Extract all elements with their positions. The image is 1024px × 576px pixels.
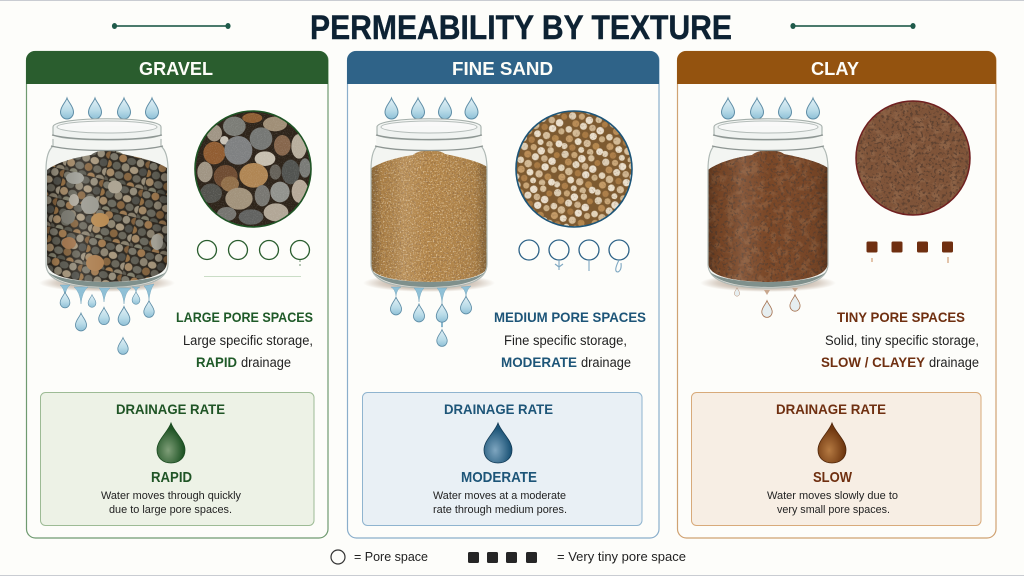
pore description (176, 309, 313, 370)
pore description: RAPID (196, 354, 237, 370)
pore description: drainage (929, 355, 979, 370)
pore description (821, 309, 979, 370)
icon: green drop (157, 423, 185, 463)
water draining from jar (60, 284, 154, 354)
magnified clay circle (855, 100, 971, 216)
tiny pore squares (866, 242, 953, 263)
pore description: LARGE PORE SPACES (176, 309, 313, 325)
drainage rate box (40, 392, 314, 526)
panel frame (26, 52, 328, 538)
title ornament right (790, 23, 916, 29)
drainage rate box (362, 392, 642, 526)
water drops above jar (722, 98, 820, 119)
header bar (677, 51, 996, 84)
panel: gravel (26, 51, 328, 538)
title: PERMEABILITY BY TEXTURE (310, 9, 732, 47)
icon: blue drop (484, 423, 512, 463)
heading: GRAVEL (139, 58, 213, 79)
water draining from jar (390, 286, 472, 346)
pore space circles (198, 240, 310, 276)
pore description: drainage (581, 355, 631, 370)
drainage rate box: DRAINAGE RATE (116, 401, 225, 417)
panel: clay (677, 51, 996, 538)
drainage rate box: rate through medium pores. (433, 504, 567, 516)
legend: tiny pore squares (468, 552, 537, 563)
water drops above jar (60, 98, 158, 119)
header bar (347, 51, 659, 84)
drainage rate box: Water moves at a moderate (433, 490, 566, 502)
pore description (494, 309, 646, 370)
drainage rate box: MODERATE (461, 469, 537, 486)
pore description: SLOW / CLAYEY (821, 354, 926, 370)
pore description: Large specific storage, (183, 333, 313, 348)
jar of gravel (39, 119, 175, 292)
drainage rate box: RAPID (151, 469, 192, 486)
legend: = Pore space (354, 549, 428, 564)
magnified sand circle (516, 111, 632, 227)
legend: pore space circle (331, 550, 345, 564)
jar of sand (363, 119, 495, 292)
pore description: TINY PORE SPACES (837, 309, 965, 325)
legend: = Very tiny pore space (557, 549, 686, 564)
drainage rate box: Water moves through quickly (101, 490, 241, 502)
heading: CLAY (811, 58, 860, 79)
panel frame (348, 52, 659, 538)
pore description: MODERATE (501, 354, 577, 370)
drainage rate box: DRAINAGE RATE (776, 401, 886, 417)
jar of clay (700, 119, 836, 292)
magnified gravel circle (195, 111, 311, 227)
drainage rate box: SLOW (813, 469, 853, 486)
pore description: MEDIUM PORE SPACES (494, 309, 646, 325)
pore space circles (519, 240, 629, 272)
water draining from jar (734, 288, 800, 317)
header bar (26, 51, 328, 84)
heading: FINE SAND (452, 58, 553, 79)
drainage rate box: due to large pore spaces. (109, 504, 232, 516)
legend (331, 549, 686, 564)
pore description: Solid, tiny specific storage, (825, 333, 979, 348)
icon: brown drop (818, 423, 846, 463)
drainage rate box: DRAINAGE RATE (444, 401, 553, 417)
panel frame (678, 52, 996, 538)
drainage rate box: Water moves slowly due to (767, 490, 898, 502)
pore description: Fine specific storage, (504, 333, 627, 348)
drainage rate box (692, 392, 981, 526)
panel: fine sand (347, 51, 659, 538)
water drops above jar (385, 98, 478, 119)
title ornament left (112, 23, 231, 29)
drainage rate box: very small pore spaces. (777, 504, 890, 516)
pore description: drainage (241, 355, 291, 370)
